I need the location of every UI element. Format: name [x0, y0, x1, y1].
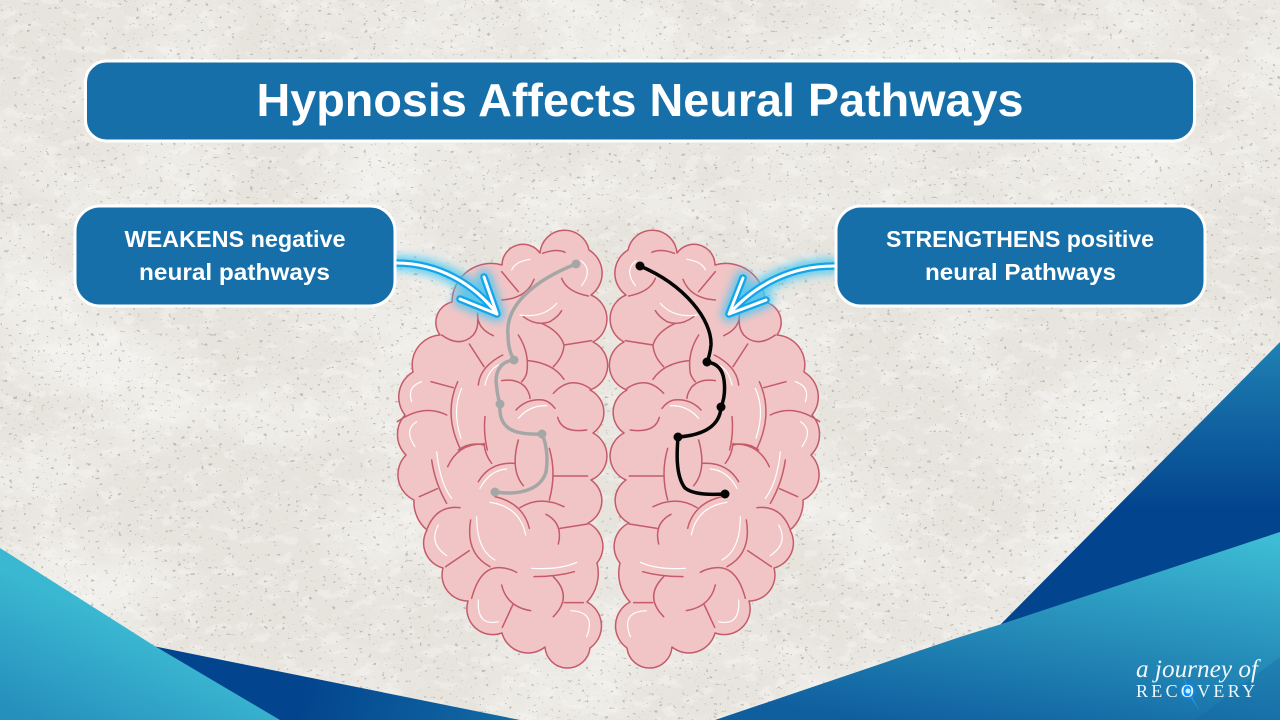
left hemisphere upper folds	[397, 251, 592, 450]
logo: a journey of recovery: RECOVERY	[1136, 681, 1255, 701]
callout: weakens negative pathways: neural pathways	[139, 259, 330, 285]
callout: strengthens positive pathways: neural Pathways	[925, 259, 1116, 285]
callout: weakens negative pathways	[75, 206, 395, 306]
logo: a journey of recovery	[1136, 656, 1261, 712]
logo sparkle	[1181, 674, 1200, 712]
callout: strengthens positive pathways	[836, 206, 1205, 306]
left brain hemisphere	[397, 230, 608, 668]
logo: a journey of recovery: a journey of	[1136, 656, 1261, 683]
right hemisphere lower folds	[628, 440, 798, 637]
corner shapes: bottom left	[0, 548, 520, 720]
left hemisphere lower folds	[419, 440, 589, 637]
arrow: strengthens, pointing to right hemisphere	[729, 266, 834, 314]
corner shapes: bottom right	[715, 342, 1280, 720]
right hemisphere upper folds	[625, 251, 820, 450]
arrow: weakens, pointing to left hemisphere	[396, 263, 497, 314]
left hemisphere outline	[397, 230, 608, 668]
right brain hemisphere	[609, 230, 820, 668]
title banner: Hypnosis Affects Neural Pathways	[256, 74, 1024, 126]
title banner	[86, 61, 1194, 141]
callout: strengthens positive pathways: STRENGTHENS positive	[886, 226, 1154, 252]
strengthened neural pathway (black)	[636, 262, 730, 498]
right hemisphere outline	[609, 230, 820, 668]
callout: weakens negative pathways: WEAKENS negative	[124, 226, 346, 252]
weakened neural pathway (grey)	[490, 260, 580, 496]
